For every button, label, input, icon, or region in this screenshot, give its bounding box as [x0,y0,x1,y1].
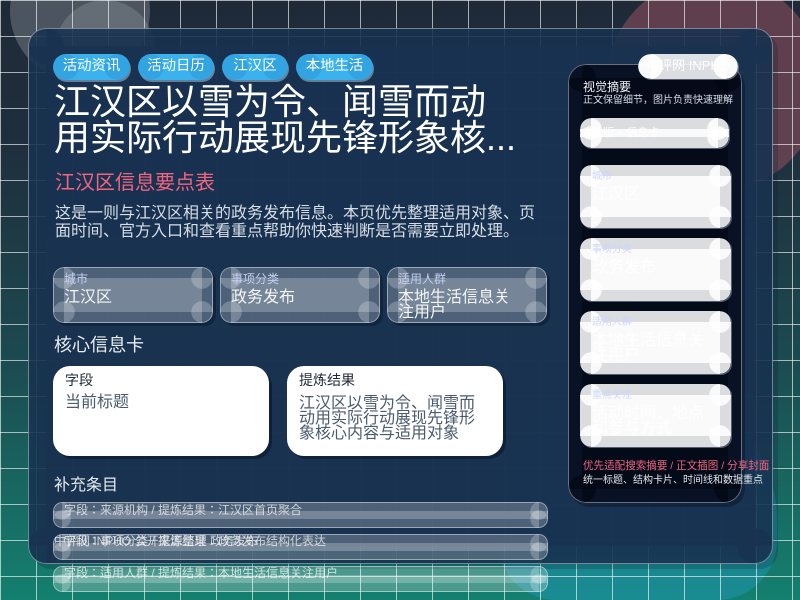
metric card: 事项分类: 政务发布 [231,289,295,306]
metric card: 适用人群 [387,267,547,323]
title: 江汉区以雪为令、闻雪而动 [54,81,486,122]
circle: top right pink [606,0,800,192]
tag: 活动资讯 [53,54,130,80]
usage note white: 统一标题、结构卡片、时间线和数据重点 [583,475,763,486]
info card: 提炼结果: 象核心内容与适用对象 [299,425,459,442]
tag: 江汉区: 江汉区 [233,58,277,74]
list row 3: 字段：适用人群 / 提炼结果：本地生活信息关注用户 [64,566,338,580]
metric card: 城市 [53,267,213,323]
title: 用实际行动展现先锋形象核... [54,117,516,158]
metric card: 适用人群: 注用户 [398,304,446,321]
summary card: 适用人群: 适用人群 [592,317,632,328]
summary card: 适用人群: 注用户 [592,347,640,364]
list row 1 [53,502,548,528]
tag: 活动资讯: 活动资讯 [63,58,120,74]
list row 2 [53,534,548,560]
summary caption: 正文保留细节，图片负责快速理解 [583,95,733,106]
source pill: 中评网 INPHO [646,58,730,73]
tag: 本地生活 [296,54,373,80]
summary card: 城市: 江汉区 [592,186,640,203]
metric card: 城市: 江汉区 [64,289,112,306]
summary card: 事项分类: 政务发布 [592,259,656,276]
summary card: format: 头版 + 信息卡 [592,127,660,139]
circle: top left large [10,0,150,81]
summary card: 重点关注 [580,384,731,447]
usage note pink: 优先适配搜索摘要 / 正文插图 / 分享封面 [583,460,769,472]
metric card: 事项分类: 事项分类 [231,272,279,286]
info card: 字段: 当前标题 [65,394,129,411]
intro paragraph [55,204,535,240]
info card: 提炼结果: 提炼结果 [299,372,355,388]
source pill [638,54,738,79]
list row 2: 字段：事项分类 / 提炼结果：政务发布结构化表达 [64,534,326,548]
metric card: 城市: 城市 [64,272,88,286]
circle: bottom teal [497,380,777,600]
tag: 活动日历: 活动日历 [147,58,205,74]
circle: top left small [55,0,155,100]
summary card: 重点关注: 活动时间、地点 [592,405,704,422]
source note: 中评网 INPHO 公开来源整理 政务发布 [54,534,258,548]
title [54,81,516,158]
intro paragraph: 这是一则与江汉区相关的政务发布信息。本页优先整理适用对象、页 [55,205,535,222]
tag: 江汉区 [222,54,288,80]
summary card: 适用人群: 本地生活信息关 [592,332,704,349]
summary heading: 视觉摘要 [583,80,631,94]
summary card: 城市: 城市 [592,171,612,182]
info card: 提炼结果 [287,366,503,456]
tag: 本地生活: 本地生活 [306,58,363,74]
info card: 字段 [53,366,269,456]
heading: 补充条目: 补充条目 [54,477,118,494]
summary card: 事项分类 [580,238,731,301]
metric card: 适用人群: 本地生活信息关 [398,289,510,306]
summary card: 事项分类: 事项分类 [592,244,632,255]
summary card: 城市 [580,165,731,228]
summary card: 重点关注: 和参与方式 [592,420,672,437]
heading: 核心信息卡: 核心信息卡 [54,335,144,355]
intro paragraph: 面时间、官方入口和查看重点帮助你快速判断是否需要立即处理。 [55,223,519,240]
metric card: 事项分类 [220,267,380,323]
summary card: 适用人群 [580,311,731,374]
info card: 字段: 字段 [65,372,93,388]
list row 3 [53,566,548,592]
panel: visual summary [568,64,742,503]
info card: 提炼结果: 江汉区以雪为令、闻雪而 [299,395,475,412]
tag: 活动日历 [138,54,214,80]
subtitle: 江汉区信息要点表 [55,172,215,194]
summary card: format [580,118,729,148]
list row 1: 字段：来源机构 / 提炼结果：江汉区首页聚合 [64,503,302,517]
metric card: 适用人群: 适用人群 [398,272,446,286]
summary card: 重点关注: 重点关注 [592,390,632,401]
info card: 提炼结果: 动用实际行动展现先锋形 [299,410,475,427]
